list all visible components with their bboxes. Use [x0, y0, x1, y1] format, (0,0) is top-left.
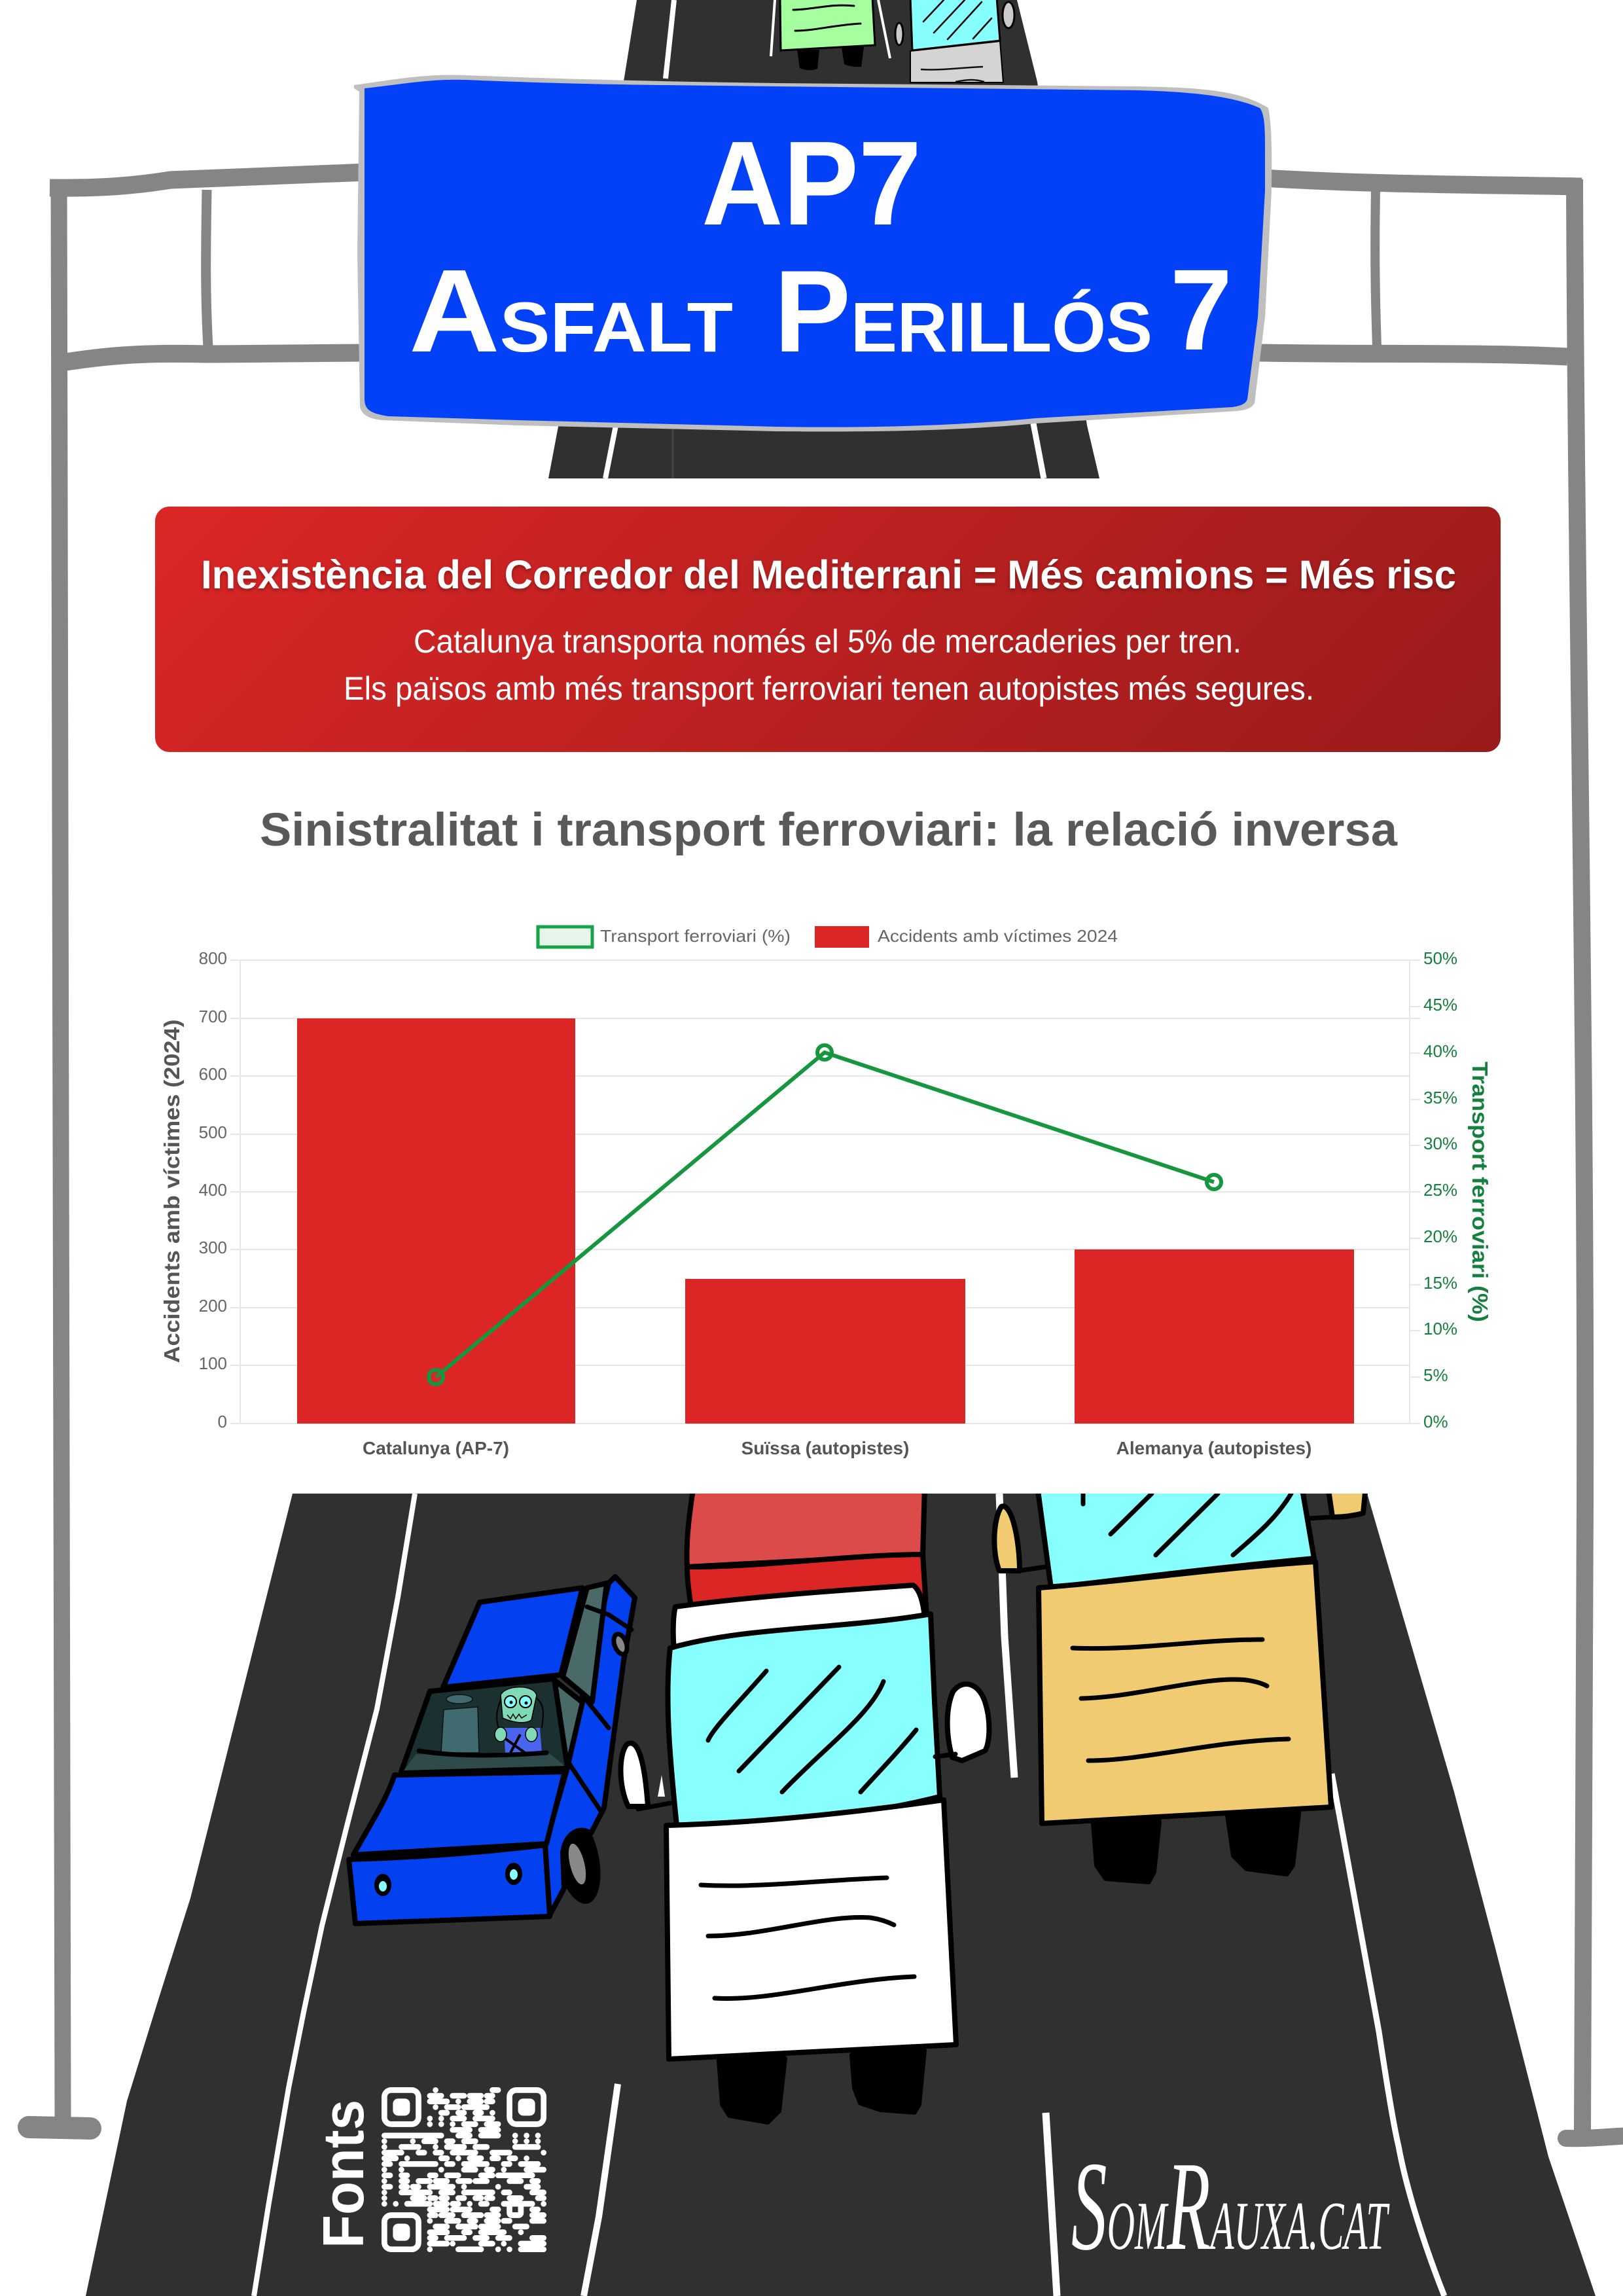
blue car with driver — [349, 1577, 635, 1924]
sign title: Asfalt Perillós 7: PERILLÓS — [774, 246, 1152, 376]
right axis labels: 15% — [1423, 1273, 1457, 1293]
left axis labels: 200 — [199, 1296, 227, 1316]
car side — [545, 1577, 635, 1915]
distant green truck — [780, 0, 875, 70]
mirrors — [994, 1506, 1020, 1571]
yellow body — [1039, 1562, 1331, 1823]
bars: accidents with victims — [297, 1018, 1354, 1424]
right axis labels: 25% — [1423, 1180, 1457, 1200]
right axis labels: 5% — [1423, 1365, 1448, 1385]
roof — [443, 1588, 582, 1687]
sign title: Asfalt Perillós 7: ASFALT — [409, 245, 733, 377]
banner text line 1: Catalunya transporta només el 5% de mercaderies per tren. — [414, 623, 1241, 660]
sign title: Asfalt Perillós 7: 7 — [1170, 246, 1232, 374]
tyres — [719, 2051, 924, 2122]
right axis labels: 20% — [1423, 1227, 1457, 1246]
left axis labels: 300 — [199, 1238, 227, 1257]
left axis labels — [199, 948, 227, 1431]
right axis labels: 45% — [1423, 995, 1457, 1014]
right axis labels: 35% — [1423, 1088, 1457, 1107]
left axis labels: 400 — [199, 1180, 227, 1200]
chart title: Sinistralitat i transport ferroviari: la relació inversa — [260, 804, 1398, 856]
driver — [495, 1687, 543, 1754]
white truck: trailer and cab — [620, 1486, 989, 2122]
lane markings — [254, 1494, 1444, 2296]
chart legend: Transport ferroviari (%) — [600, 926, 791, 946]
left axis title: Accidents amb víctimes (2024) — [160, 1020, 184, 1363]
banner: Mediterranean corridor message — [155, 507, 1501, 752]
wheel — [548, 1810, 608, 1908]
chart legend: Accidents amb víctimes 2024 — [878, 926, 1118, 946]
left axis labels: 500 — [199, 1122, 227, 1142]
QR code — [384, 2090, 544, 2250]
sign title: AP7: AP7 — [702, 116, 921, 250]
left axis labels: 700 — [199, 1007, 227, 1026]
gantry: right post and bars — [1260, 178, 1623, 2138]
sign title: Asfalt Perillós 7 — [409, 245, 1232, 377]
red trailer — [687, 1486, 925, 1567]
tyres — [1094, 1813, 1298, 1882]
right axis labels: 50% — [1423, 948, 1457, 968]
hood — [353, 1772, 565, 1855]
white body — [666, 1800, 956, 2059]
distant cyan and grey truck — [895, 0, 1014, 82]
road: top section behind the sign — [548, 0, 1099, 478]
seat — [441, 1707, 479, 1753]
banner text line 2: Els països amb més transport ferroviari tenen autopistes més segures. — [344, 670, 1314, 707]
headlights — [374, 1874, 391, 1896]
left axis labels: 0 — [218, 1412, 227, 1431]
left axis labels: 800 — [199, 948, 227, 968]
right axis title: Transport ferroviari (%) — [1468, 1062, 1492, 1322]
windscreen — [1037, 1486, 1314, 1588]
windscreen — [668, 1614, 940, 1825]
motorway sign — [354, 75, 1272, 431]
label: Fonts: Fonts — [311, 2100, 376, 2248]
gantry: left post and bars — [29, 172, 366, 2128]
signature: SomRauxa.cat: SOMRAUXA.CAT — [1071, 2136, 1390, 2277]
category labels: Alemanya (autopistes) — [1116, 1438, 1311, 1458]
left axis labels: 100 — [199, 1354, 227, 1373]
mirrors — [948, 1684, 989, 1761]
right axis labels: 10% — [1423, 1319, 1457, 1338]
dashboard — [404, 1753, 565, 1770]
right axis labels: 0% — [1423, 1412, 1448, 1431]
chart legend — [538, 926, 1118, 948]
front — [349, 1845, 550, 1924]
cab roof — [673, 1585, 925, 1649]
line: rail transport share — [429, 1045, 1221, 1384]
combo chart — [160, 926, 1492, 1458]
category labels: Suïssa (autopistes) — [741, 1438, 909, 1458]
road: bottom section — [86, 1494, 1596, 2296]
right axis labels: 30% — [1423, 1134, 1457, 1153]
banner heading: Inexistència del Corredor del Mediterrani = Més camions = Més risc — [201, 552, 1456, 597]
right axis labels: 40% — [1423, 1041, 1457, 1061]
left axis labels: 600 — [199, 1064, 227, 1084]
mirror — [611, 1632, 630, 1656]
category labels — [363, 1438, 1311, 1458]
category labels: Catalunya (AP-7) — [363, 1438, 509, 1458]
windscreen — [401, 1679, 567, 1772]
yellow truck — [994, 1486, 1366, 1882]
right axis labels — [1423, 948, 1457, 1431]
